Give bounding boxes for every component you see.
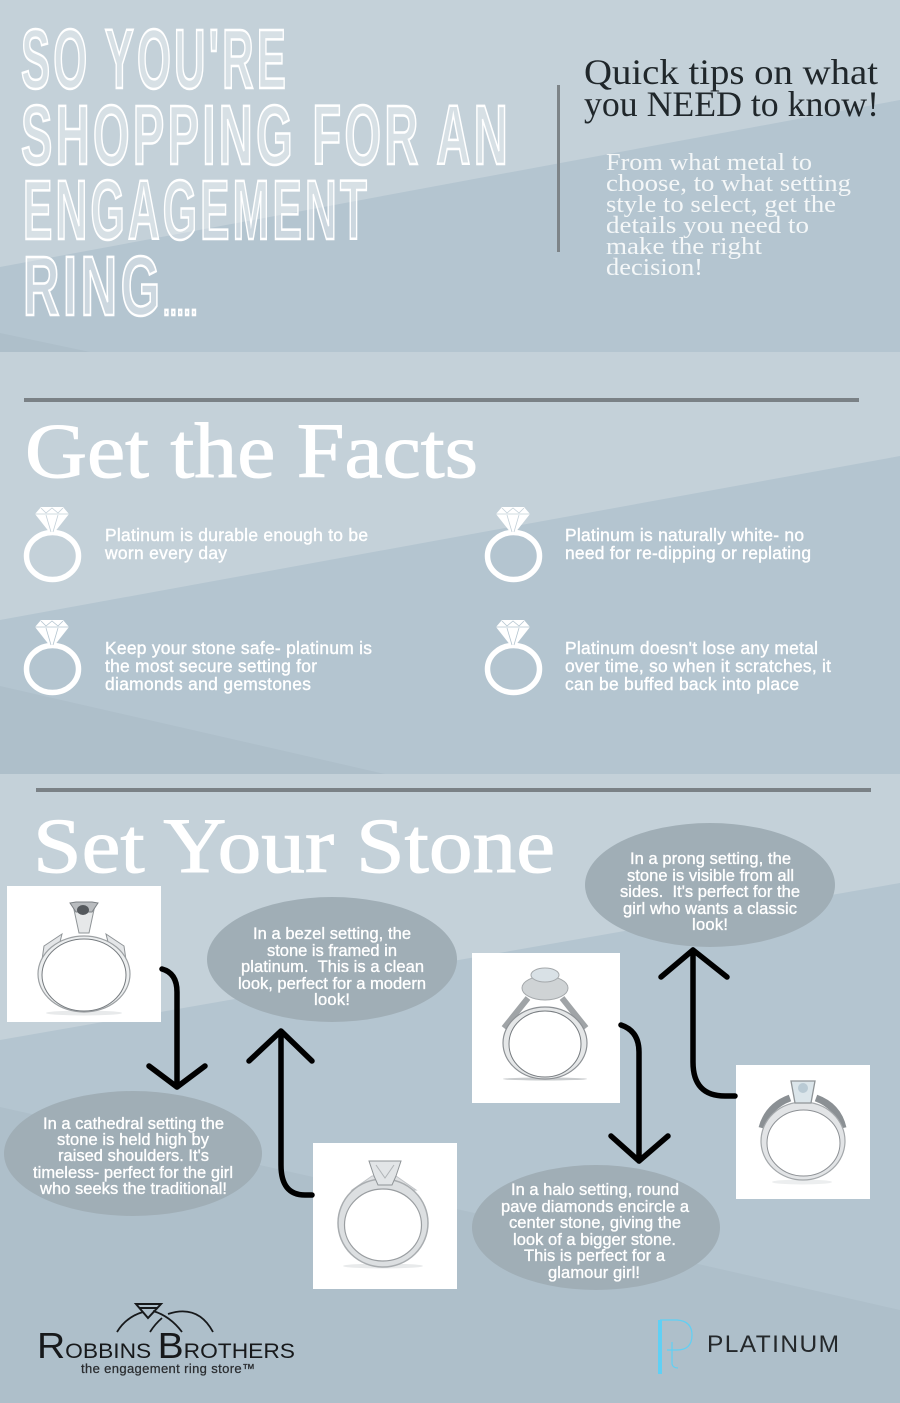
oval: halo setting: glamour girl! xyxy=(548,1264,640,1282)
oval: cathedral setting: In a cathedral setting the xyxy=(43,1115,224,1133)
fact 4 text: over time, so when it scratches, it xyxy=(565,656,831,676)
fact 2 text: Platinum is naturally white- no xyxy=(565,525,804,545)
icon: diamond ring 2 xyxy=(488,507,540,580)
oval: prong setting: girl who wants a classic xyxy=(623,900,797,918)
oval: bezel setting xyxy=(207,897,457,1022)
title: SHOPPING FOR AN xyxy=(21,88,511,182)
title xyxy=(21,12,511,333)
facts section background xyxy=(0,352,900,774)
intro text: choose, to what setting xyxy=(606,170,851,197)
oval: halo setting: pave diamonds encircle a xyxy=(501,1198,690,1216)
fact 4 text: Platinum doesn't lose any metal xyxy=(565,638,818,658)
header background xyxy=(0,0,900,352)
quick tips heading xyxy=(584,52,879,124)
arrow: bezel ring to oval xyxy=(249,1031,312,1195)
oval: cathedral setting xyxy=(4,1091,262,1216)
stone section background xyxy=(0,774,900,1403)
arrow: prong ring to oval xyxy=(661,950,735,1096)
photo: halo ring xyxy=(472,953,620,1103)
title: ENGAGEMENT xyxy=(23,163,370,257)
logo: platinum xyxy=(658,1320,839,1374)
heading: get the facts: Get the Facts xyxy=(25,407,478,494)
logo: robbins brothers: ROBBINS BROTHERS xyxy=(37,1325,295,1366)
header divider xyxy=(557,85,560,252)
oval: prong setting: stone is visible from all xyxy=(627,867,794,885)
oval: halo setting: This is perfect for a xyxy=(524,1247,666,1265)
oval: prong setting: sides. It's perfect for the xyxy=(620,883,800,901)
fact 2 text: need for re-dipping or replating xyxy=(565,543,811,563)
fact 3 text: the most secure setting for xyxy=(105,656,317,676)
logo: robbins brothers: the engagement ring store™ xyxy=(81,1361,255,1376)
oval: cathedral setting: raised shoulders. It's xyxy=(58,1147,209,1165)
facts rule xyxy=(24,398,859,402)
logo: robbins brothers xyxy=(37,1304,295,1376)
oval: prong setting xyxy=(585,823,835,947)
fact 3 text: diamonds and gemstones xyxy=(105,674,311,694)
fact 3 text: Keep your stone safe- platinum is xyxy=(105,638,372,658)
oval: halo setting: center stone, giving the xyxy=(509,1214,681,1232)
oval: cathedral setting: stone is held high by xyxy=(57,1131,210,1149)
icon: diamond ring 3 xyxy=(26,620,78,692)
fact 2 text xyxy=(565,525,811,563)
intro text: details you need to xyxy=(606,212,809,239)
intro text: decision! xyxy=(606,254,703,281)
intro text xyxy=(606,149,851,281)
title: SO YOU'RE xyxy=(21,12,289,106)
icon: diamond ring 1 xyxy=(26,507,78,580)
icon: diamond ring 4 xyxy=(488,620,540,692)
oval: cathedral setting: who seeks the traditional! xyxy=(39,1180,227,1198)
oval: halo setting xyxy=(472,1165,720,1290)
quick tips heading: you NEED to know! xyxy=(584,84,879,124)
oval: halo setting: look of a bigger stone. xyxy=(513,1231,676,1249)
intro text: style to select, get the xyxy=(606,191,836,218)
intro text: From what metal to xyxy=(606,149,812,176)
oval: halo setting: In a halo setting, round xyxy=(511,1181,679,1199)
fact 1 text: worn every day xyxy=(104,543,227,563)
photo: bezel ring xyxy=(313,1143,457,1289)
quick tips heading: Quick tips on what xyxy=(584,52,878,92)
oval: cathedral setting: timeless- perfect for the girl xyxy=(33,1164,233,1182)
logo: platinum: PLATINUM xyxy=(707,1331,839,1358)
arrow: cathedral ring to oval xyxy=(149,969,205,1087)
photo: cathedral ring xyxy=(7,886,161,1022)
oval: bezel setting: look! xyxy=(314,991,350,1009)
title: RING..... xyxy=(23,239,198,333)
arrow: halo ring to oval xyxy=(611,1025,668,1161)
heading: set your stone: Set Your Stone xyxy=(33,802,555,889)
intro text: make the right xyxy=(606,233,762,260)
stone rule xyxy=(36,788,871,792)
oval: prong setting: look! xyxy=(692,916,728,934)
oval: prong setting: In a prong setting, the xyxy=(630,850,791,868)
fact 1 text xyxy=(104,525,368,563)
oval: bezel setting: In a bezel setting, the xyxy=(253,925,411,943)
oval: bezel setting: look, perfect for a modern xyxy=(238,975,426,993)
fact 4 text: can be buffed back into place xyxy=(565,674,799,694)
fact 1 text: Platinum is durable enough to be xyxy=(105,525,368,545)
fact 4 text xyxy=(565,638,831,694)
fact 3 text xyxy=(105,638,372,694)
oval: bezel setting: platinum. This is a clean xyxy=(241,958,424,976)
oval: bezel setting: stone is framed in xyxy=(267,942,397,960)
photo: prong ring xyxy=(736,1065,870,1199)
